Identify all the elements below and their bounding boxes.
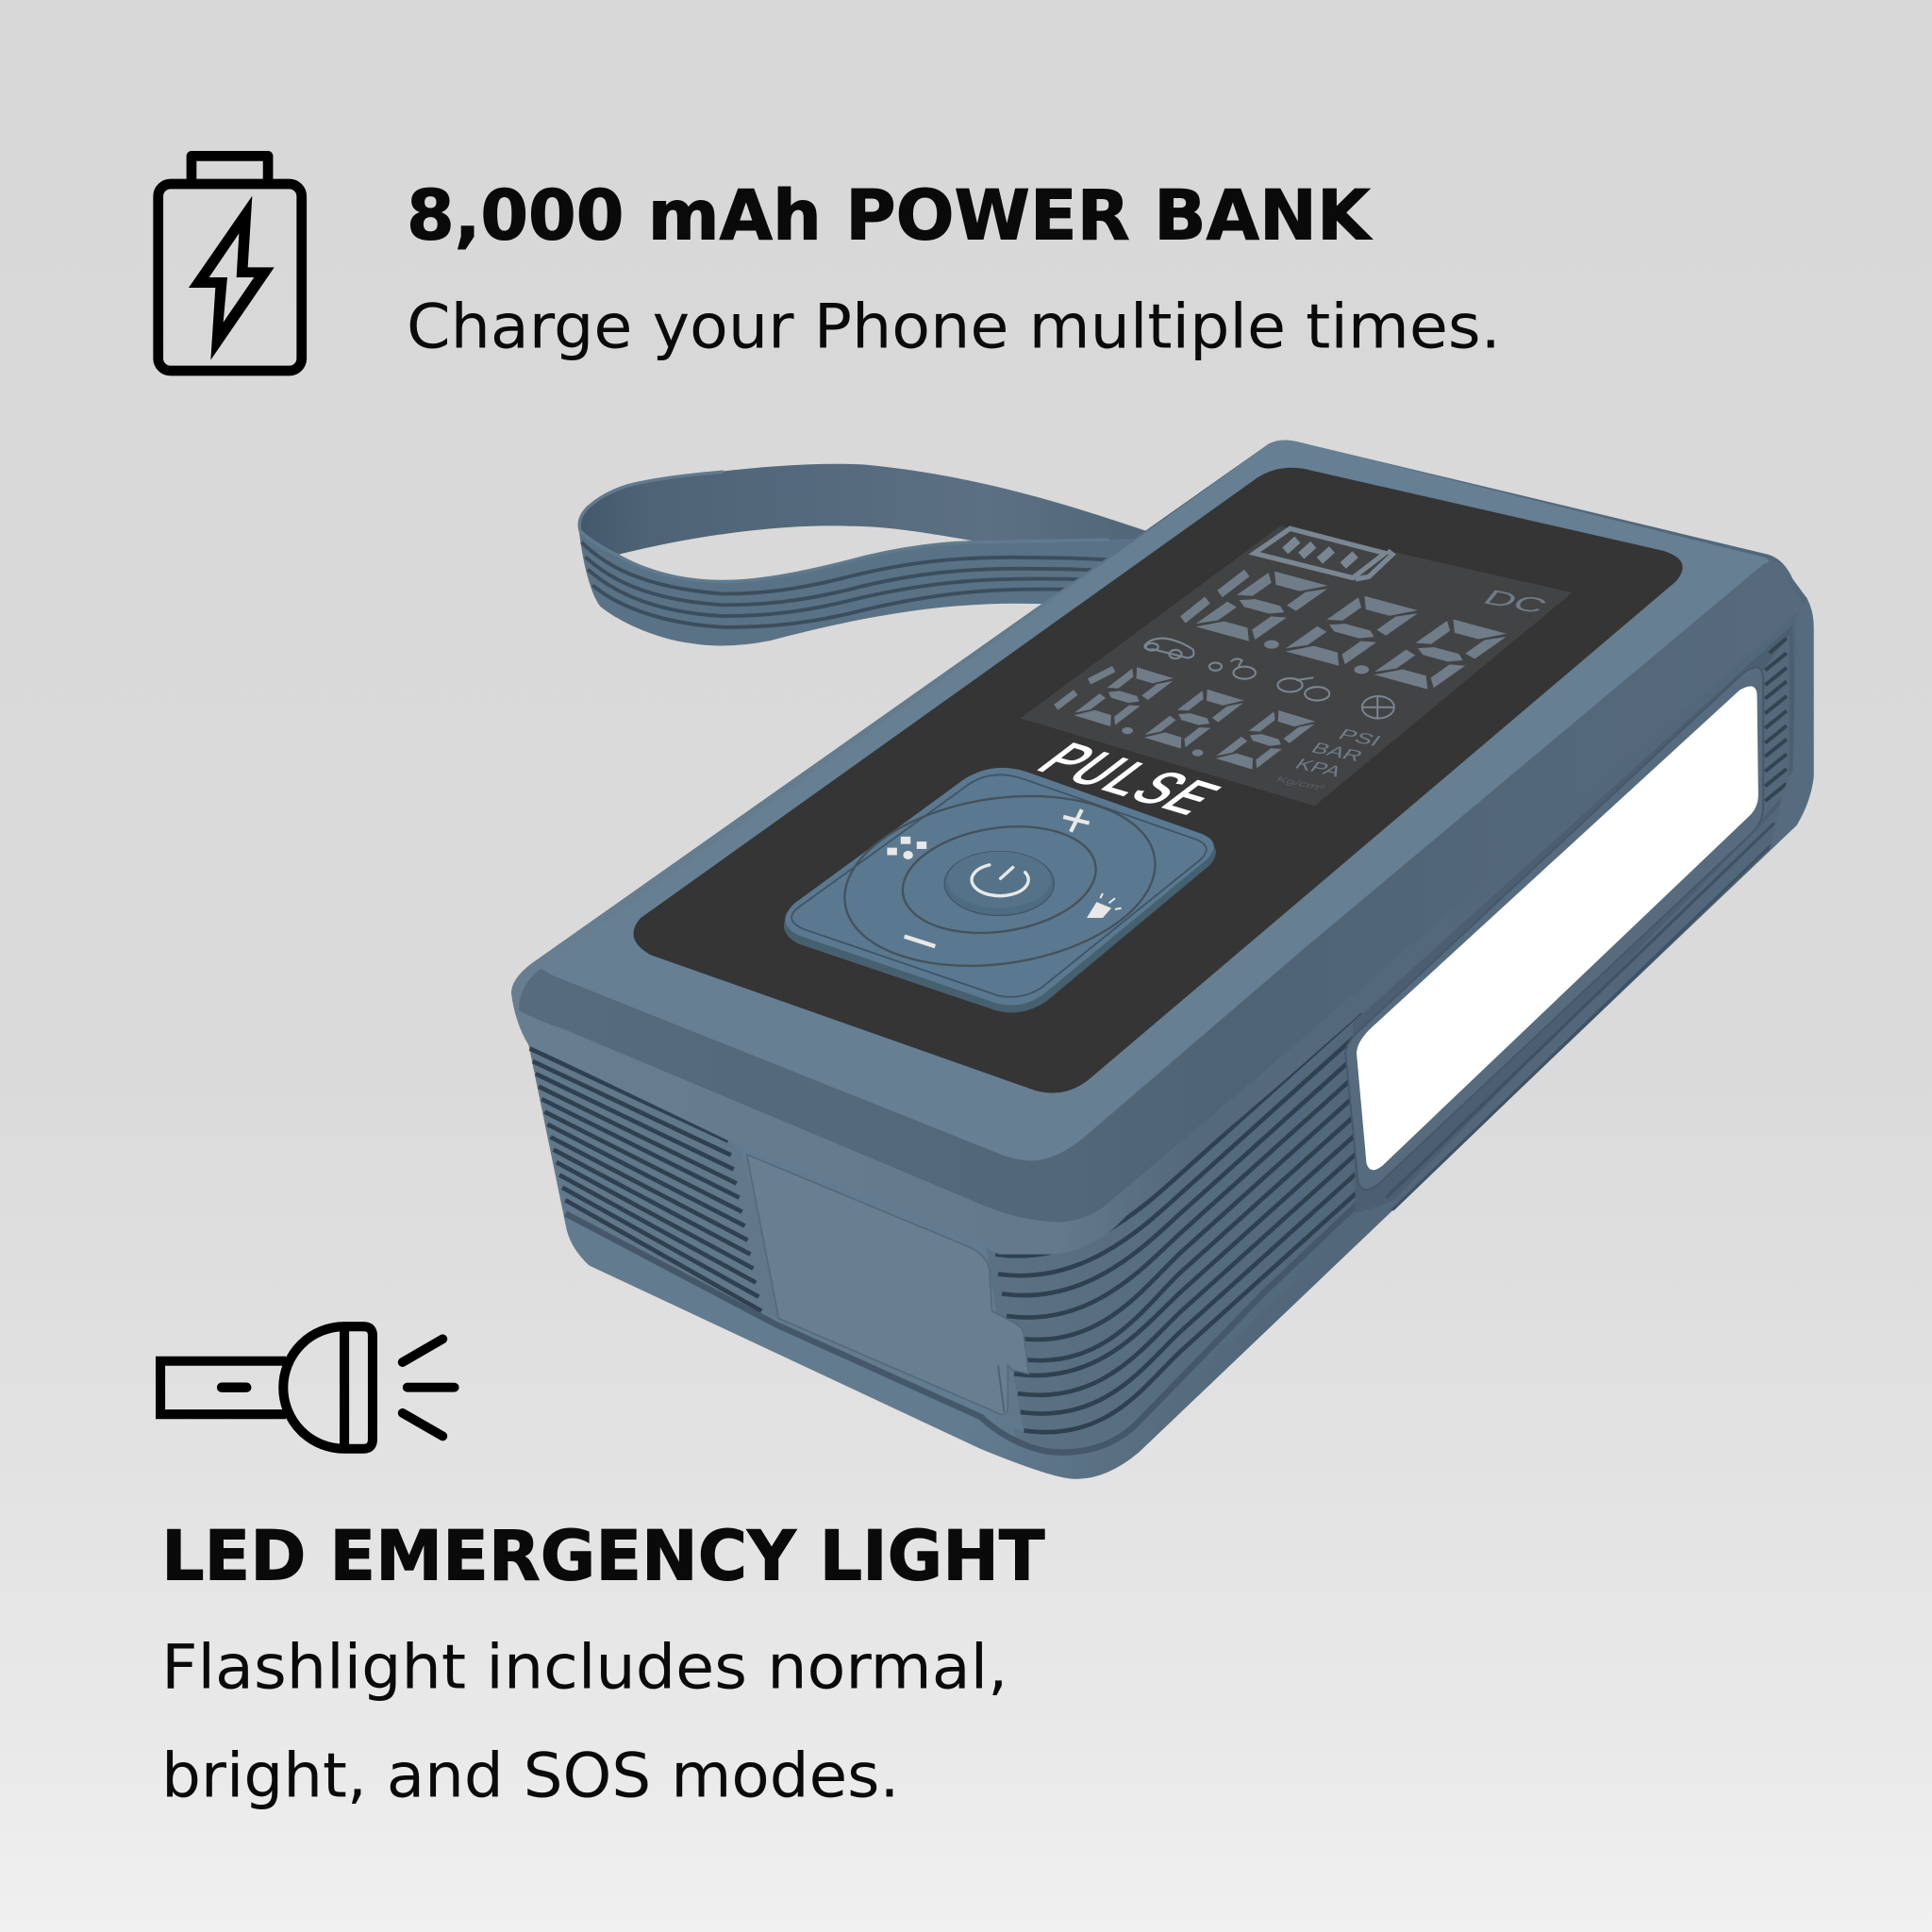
brand logo: PULSE <box>1017 735 1234 828</box>
icon: mode dots <box>887 837 926 859</box>
body silhouette <box>511 441 1814 1479</box>
outer ring <box>833 776 1167 986</box>
control button panel <box>784 768 1216 1012</box>
LCD unit labels: DC <box>1477 586 1553 618</box>
icon: flashlight <box>160 1326 455 1449</box>
power button <box>944 852 1054 915</box>
battery door cover <box>747 1155 1029 1433</box>
strap loop <box>578 464 1164 646</box>
icon: plus <box>1063 809 1090 832</box>
text: flashlight description: Flashlight includes normal, <box>161 1631 1008 1703</box>
LCD icon: car <box>1144 639 1194 658</box>
text: flashlight description: bright, and SOS modes. <box>161 1740 899 1811</box>
icon: torch <box>1087 893 1122 918</box>
left side ribs <box>530 1047 789 1324</box>
LCD battery gauge <box>1255 528 1392 579</box>
LCD unit labels: BAR <box>1307 739 1367 765</box>
LCD lower digits <box>1056 667 1317 770</box>
LCD display <box>1020 526 1573 806</box>
LCD unit labels <box>1274 586 1553 792</box>
top face <box>541 441 1769 1160</box>
icon: minus <box>905 937 935 946</box>
vent slats on end <box>1762 635 1789 820</box>
text: flashlight description <box>161 1631 1008 1811</box>
text: power bank description: Charge your Phone multiple times. <box>407 291 1501 362</box>
shell band <box>511 443 1807 1255</box>
product: power bank device <box>511 441 1814 1479</box>
icon: battery with lightning bolt <box>158 156 302 371</box>
LCD unit labels: Kg/cm² <box>1274 774 1327 792</box>
LED emergency light panel <box>1357 686 1758 1170</box>
LCD unit labels: KPA <box>1291 756 1346 780</box>
LCD icon: motorcycle <box>1209 658 1256 679</box>
right side ribs <box>986 986 1368 1454</box>
LCD icon: bicycle <box>1277 677 1329 701</box>
LCD upper digits <box>1183 571 1509 690</box>
LCD unit labels: PSI <box>1335 725 1385 749</box>
heading: LED emergency light: LED EMERGENCY LIGHT <box>161 1516 1045 1596</box>
end cap edge <box>1770 560 1814 850</box>
black screen <box>633 468 1683 1093</box>
icon: power <box>972 865 1028 896</box>
inner ring <box>895 814 1103 945</box>
right end recess <box>1353 625 1796 1214</box>
LED light frame <box>1345 667 1763 1190</box>
base lip line <box>566 1176 1386 1453</box>
heading: power bank: 8,000 mAh POWER BANK <box>407 175 1373 256</box>
LCD icon: ball <box>1362 696 1394 718</box>
